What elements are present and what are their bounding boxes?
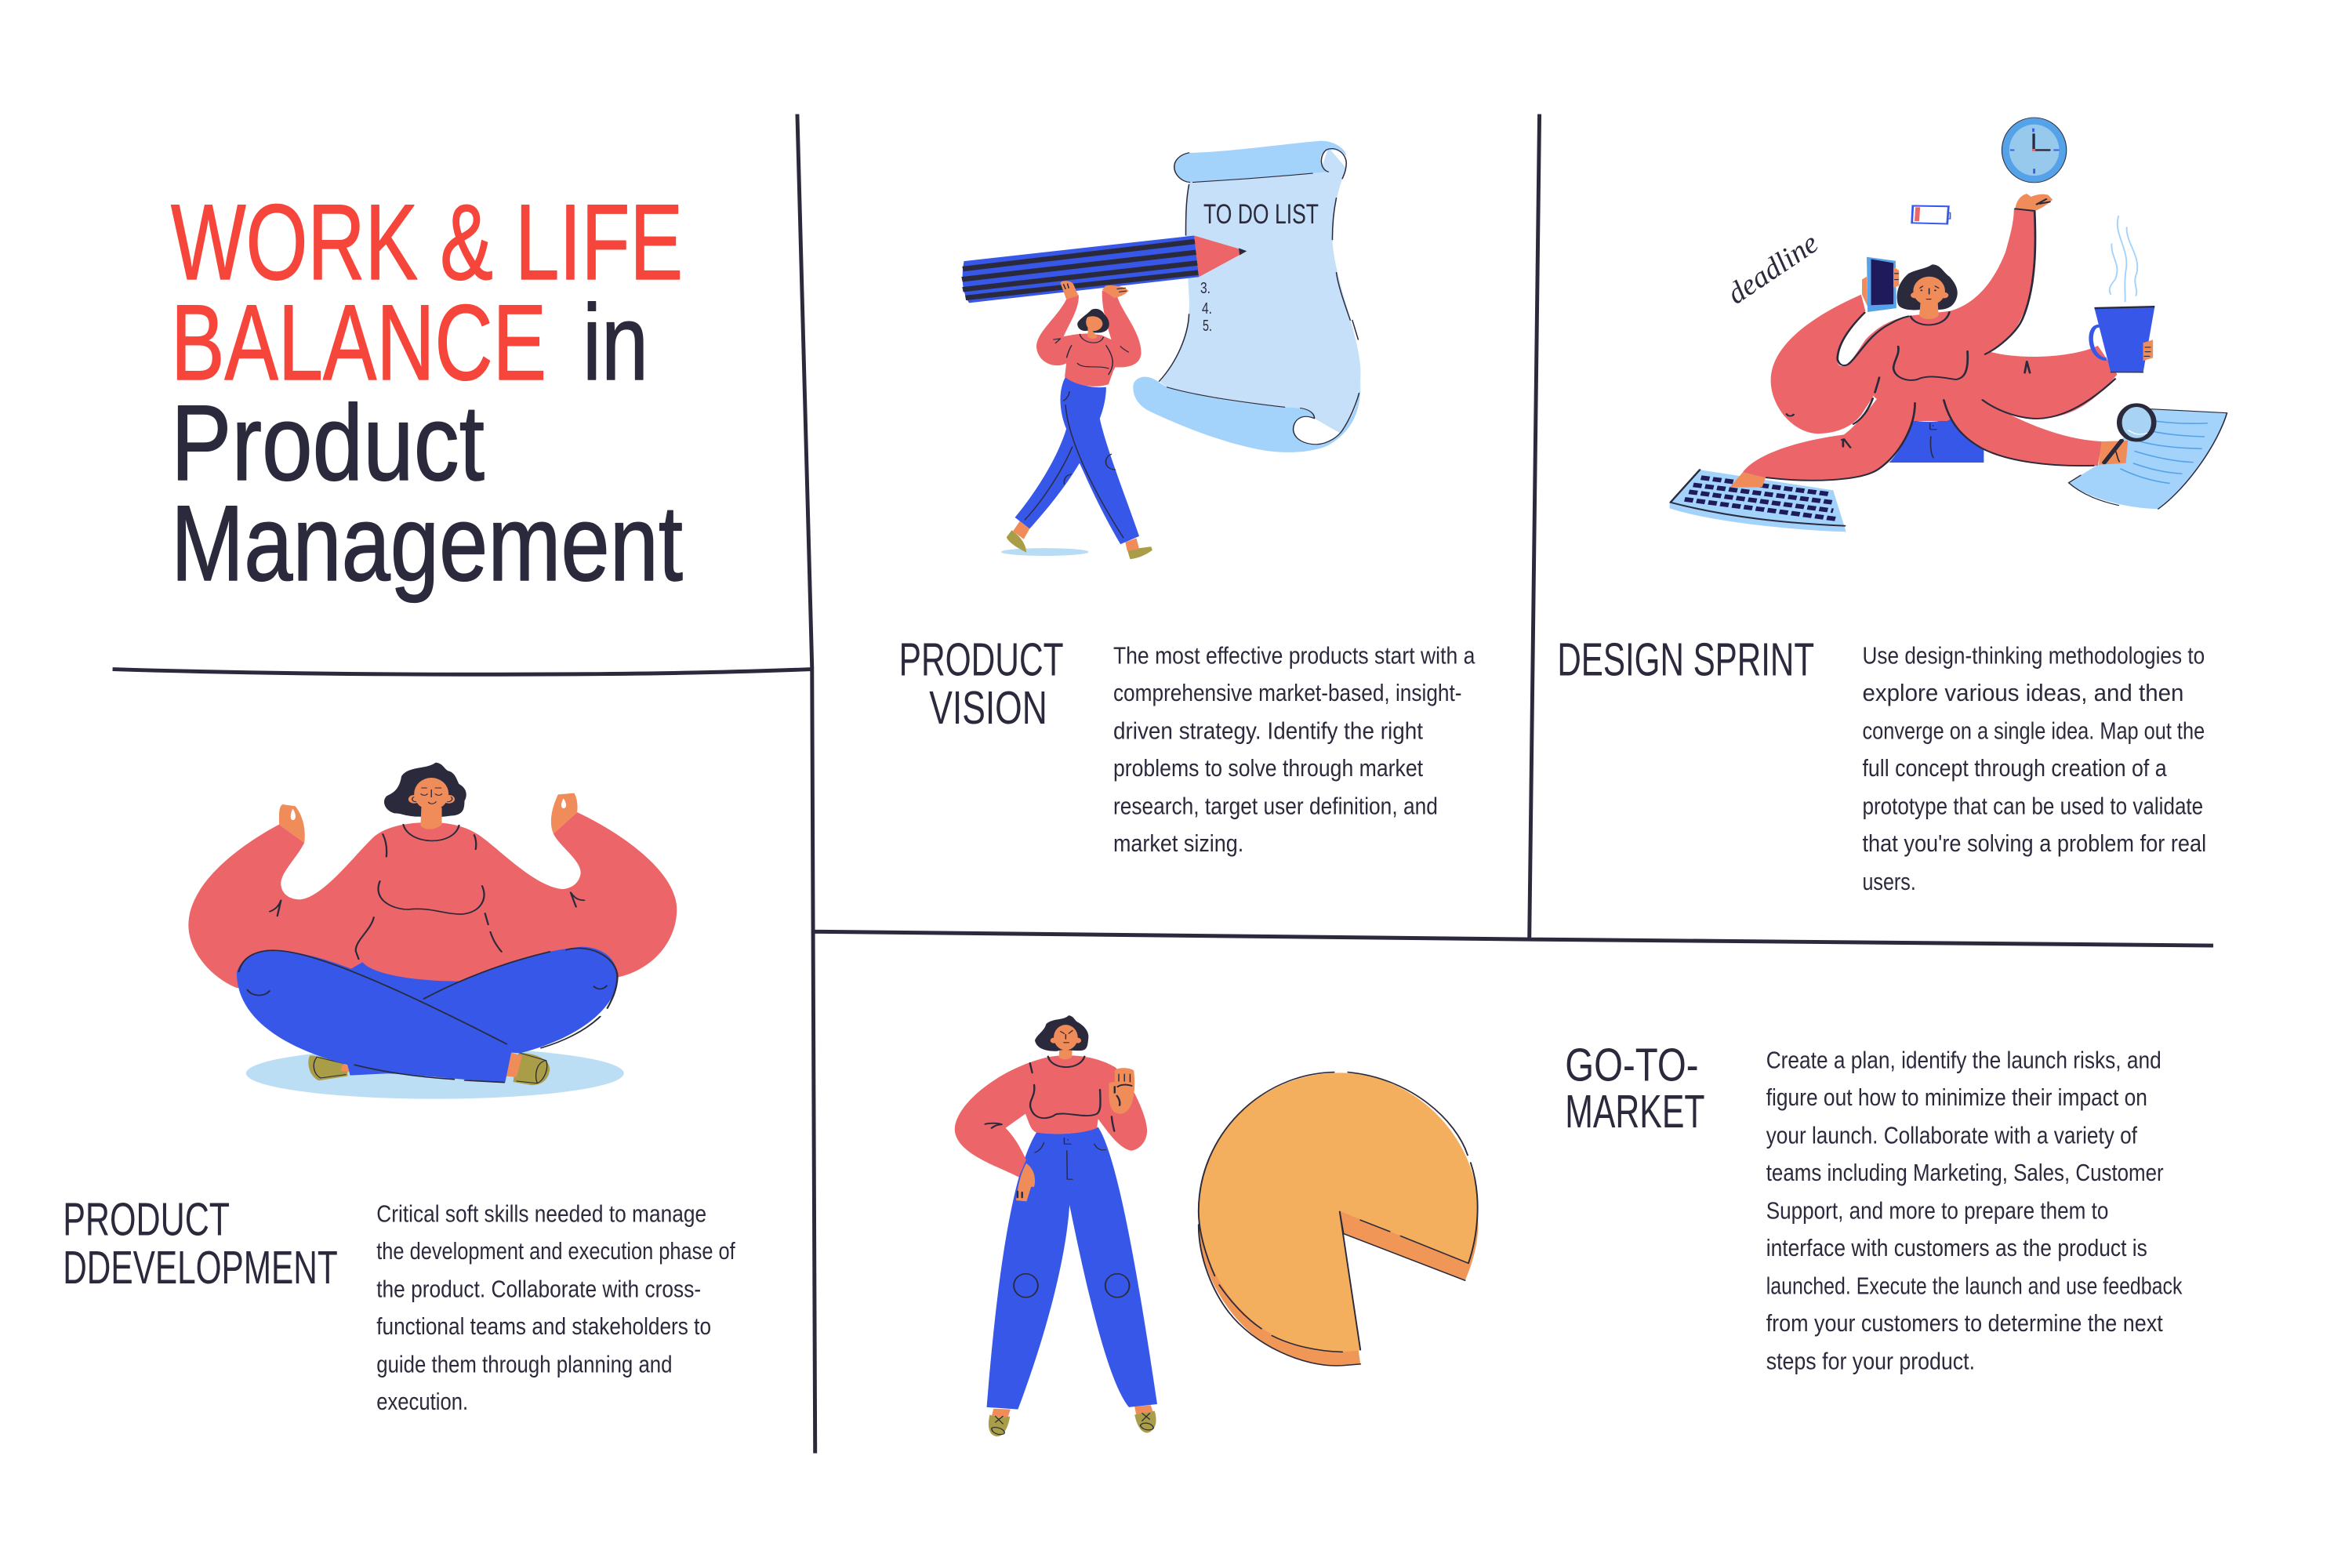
text block: product development: functional teams and stakeholders to	[376, 1312, 711, 1340]
illustration: multitasking woman with six arms: deadline	[1722, 227, 1824, 310]
text block: go-to-market: teams including Marketing, Sales, Customer	[1766, 1159, 2164, 1186]
heading: go-to-market: GO-TO-	[1565, 1038, 1699, 1091]
heading: product development	[63, 1192, 338, 1294]
text block: design sprint: full concept through creation of a	[1862, 754, 2167, 782]
text block: product vision: research, target user definition, and	[1113, 793, 1438, 820]
text block: product development	[376, 1200, 735, 1415]
text block: design sprint: prototype that can be used to validate	[1862, 793, 2203, 820]
panel: product vision	[899, 141, 1475, 857]
chart: pie with missing slice	[1199, 1073, 1478, 1366]
illustration: standing woman with stop gesture	[955, 1015, 1157, 1436]
text block: design sprint: explore various ideas, and then	[1862, 679, 2183, 706]
title: Product	[171, 383, 485, 503]
text block: go-to-market: your launch. Collaborate with a variety of	[1766, 1122, 2137, 1149]
heading: product vision	[899, 633, 1064, 734]
text block: product vision: problems to solve through market	[1113, 754, 1423, 782]
text block: go-to-market: figure out how to minimize their impact on	[1766, 1083, 2147, 1111]
illustration: meditating woman	[188, 763, 677, 1099]
heading: product vision: PRODUCT	[899, 633, 1064, 685]
title	[171, 183, 683, 604]
illustration: woman carrying pencil and to-do list: 4.	[1202, 300, 1212, 318]
text block: product development: guide them through planning and	[376, 1351, 673, 1378]
illustration: woman carrying pencil and to-do list: TO DO LIST	[1203, 199, 1319, 230]
text block: product development: Critical soft skills needed to manage	[376, 1200, 706, 1228]
heading: go-to-market	[1565, 1038, 1704, 1138]
heading: product vision: VISION	[929, 681, 1047, 734]
text block: product vision: The most effective products start with a	[1113, 642, 1475, 670]
text block: product vision: comprehensive market-based, insight-	[1113, 679, 1462, 706]
text block: product development: execution.	[376, 1388, 468, 1415]
panel: design sprint	[1557, 118, 2227, 895]
title: BALANCE	[171, 283, 546, 403]
title: WORK & LIFE	[171, 183, 683, 303]
text block: product vision	[1113, 642, 1475, 857]
text block: product development: the product. Collaborate with cross-	[376, 1276, 701, 1303]
text block: go-to-market: from your customers to determine the next	[1766, 1309, 2163, 1337]
text block: design sprint: that you're solving a problem for real	[1862, 829, 2206, 857]
illustration: woman carrying pencil and to-do list	[962, 141, 1360, 559]
text block: go-to-market: steps for your product.	[1766, 1348, 1975, 1375]
title: Management	[171, 484, 683, 604]
text block: go-to-market	[1766, 1047, 2183, 1375]
heading: product development: DDEVELOPMENT	[63, 1241, 338, 1294]
illustration: woman carrying pencil and to-do list: 3.	[1200, 280, 1210, 297]
text block: go-to-market: interface with customers as the product is	[1766, 1234, 2147, 1261]
heading: go-to-market: MARKET	[1565, 1085, 1704, 1138]
text block: design sprint: Use design-thinking methodologies to	[1862, 642, 2205, 670]
heading: product development: PRODUCT	[63, 1192, 230, 1245]
text block: go-to-market: Support, and more to prepare them to	[1766, 1197, 2108, 1225]
title: in	[583, 283, 648, 403]
heading: design sprint: DESIGN SPRINT	[1557, 633, 1814, 685]
text block: product development: the development and execution phase of	[376, 1237, 735, 1265]
text block: design sprint: converge on a single idea. Map out the	[1862, 717, 2205, 745]
text block: product vision: market sizing.	[1113, 829, 1243, 857]
text block: go-to-market: launched. Execute the launch and use feedback	[1766, 1272, 2183, 1300]
panel: go-to-market	[955, 1015, 2183, 1436]
text block: design sprint: users.	[1862, 868, 1916, 895]
text block: product vision: driven strategy. Identify the right	[1113, 717, 1423, 745]
text block: go-to-market: Create a plan, identify the launch risks, and	[1766, 1047, 2161, 1074]
illustration: woman carrying pencil and to-do list: 5.	[1203, 318, 1212, 335]
panel: product development	[63, 763, 735, 1415]
text block: design sprint	[1862, 642, 2206, 895]
illustration: multitasking woman with six arms	[1670, 118, 2227, 532]
